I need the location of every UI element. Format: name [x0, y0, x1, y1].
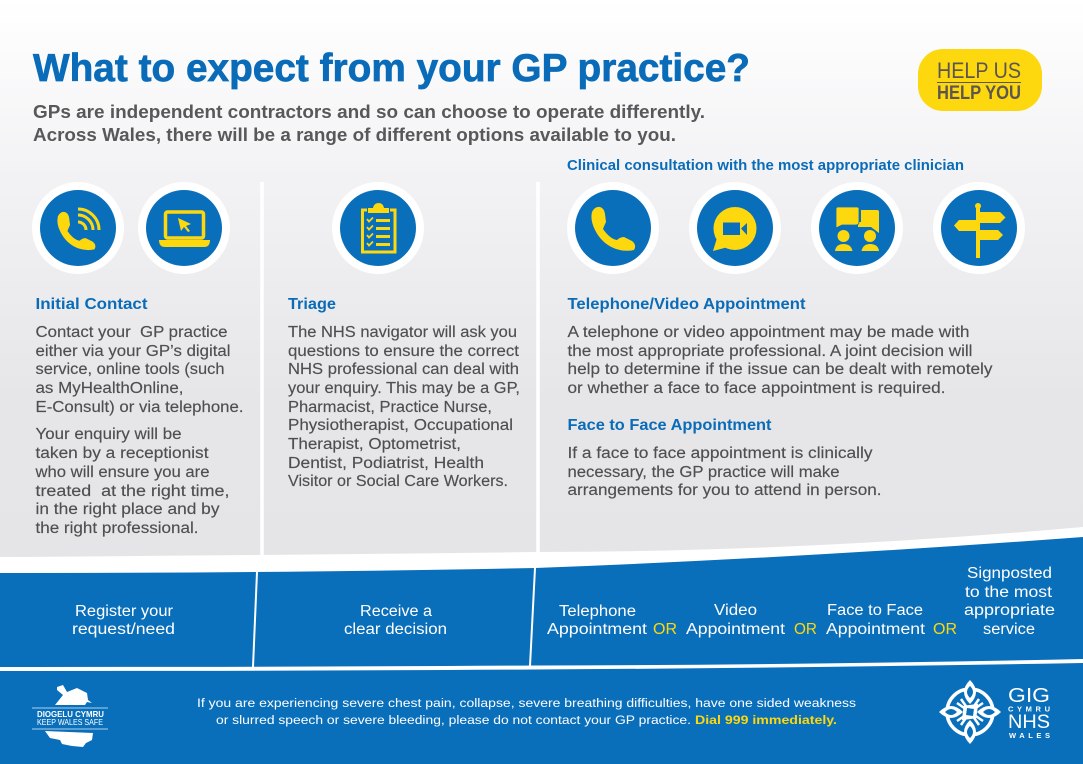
text block: initial contact: who will ensure you are	[34, 464, 209, 481]
icon: phone with signal	[32, 182, 124, 274]
text block: telephone/video appointment	[568, 296, 993, 397]
outcome: clear decision: Receive a	[360, 603, 432, 620]
logo: GIG Cymru NHS Wales: NHS	[1008, 712, 1050, 733]
text block: initial contact: Your enquiry will be	[36, 426, 182, 443]
text block: triage: Pharmacist, Practice Nurse,	[288, 399, 492, 416]
text block: initial contact: as MyHealthOnline,	[36, 380, 184, 397]
panel: grey background	[0, 0, 1083, 557]
text block: initial contact: in the right place and by	[36, 501, 220, 518]
outcome: signposted: Signposted	[967, 565, 1052, 582]
outcome: video appointment: Appointment	[686, 621, 786, 638]
footer warning text	[197, 696, 856, 727]
logo: GIG Cymru NHS Wales: WALES	[1009, 731, 1050, 740]
text block: initial contact: taken by a receptionist	[36, 445, 209, 462]
text block: telephone/video appointment: or whether a face to face appointment is required.	[568, 380, 946, 397]
text block: face to face appointment: Face to Face Appointment	[568, 417, 772, 434]
icon: signpost	[933, 182, 1025, 274]
logo: keep wales safe: KEEP WALES SAFE	[37, 718, 103, 727]
outcome: signposted: to the most	[965, 584, 1053, 601]
icon: clipboard checklist	[332, 182, 424, 274]
outcome: telephone appointment	[547, 603, 677, 638]
text block: initial contact: E-Consult) or via telephone.	[36, 399, 244, 416]
text block: triage: NHS professional can deal with	[288, 361, 519, 378]
footer warning text: If you are experiencing severe chest pain, collapse, severe breathing difficulties, have one sided weakness	[197, 696, 856, 710]
icon: conversation	[811, 182, 903, 274]
text block: triage	[288, 296, 520, 490]
text block: face to face appointment: arrangements for you to attend in person.	[568, 482, 882, 499]
panel: blue outcomes band	[0, 537, 1083, 667]
logo: keep wales safe: DIOGELU CYMRU	[37, 709, 104, 719]
badge: help us help you: HELP YOU	[937, 83, 1021, 104]
outcome: face to face appointment: Face to Face	[827, 602, 923, 619]
intro text: Across Wales, there will be a range of different options available to you.	[33, 125, 676, 145]
outcome: face to face appointment: OR	[933, 621, 957, 638]
text block: face to face appointment: If a face to face appointment is clinically	[568, 445, 873, 462]
title: What to expect from your GP practice?	[33, 47, 750, 90]
outcome: face to face appointment: Appointment	[826, 621, 926, 638]
text block: initial contact: either via your GP’s digital	[36, 343, 230, 360]
panel: blue footer	[0, 663, 1083, 764]
logo: GIG Cymru NHS Wales: GIG	[1008, 685, 1050, 707]
text block: triage: Triage	[288, 296, 336, 313]
text block: face to face appointment	[568, 417, 882, 499]
logo: keep wales safe	[32, 685, 108, 747]
outcome: video appointment: OR	[794, 621, 817, 638]
logo: GIG Cymru NHS Wales: CYMRU	[1008, 704, 1050, 714]
icon: video chat	[689, 182, 781, 274]
badge: help us help you	[918, 49, 1042, 111]
text block: triage: questions to ensure the correct	[288, 343, 520, 360]
outcome: register request: request/need	[72, 621, 175, 638]
outcome: telephone appointment: OR	[653, 621, 677, 638]
outcome: signposted: appropriate	[964, 602, 1055, 619]
text block: initial contact: service, online tools (such	[36, 361, 224, 378]
text block: telephone/video appointment: the most appropriate professional. A joint decision will	[568, 343, 972, 360]
text block: initial contact: the right professional.	[36, 520, 198, 537]
outcome: telephone appointment: Telephone	[559, 603, 636, 620]
outcome: register request: Register your	[75, 603, 173, 620]
footer warning text: or slurred speech or severe bleeding, please do not contact your GP practice.	[216, 713, 691, 727]
text block: telephone/video appointment: help to determine if the issue can be dealt with remotely	[568, 361, 993, 378]
text block: telephone/video appointment: Telephone/Video Appointment	[568, 296, 806, 313]
text block: initial contact	[34, 296, 244, 537]
icon: telephone	[567, 182, 659, 274]
text block: triage: Therapist, Optometrist,	[288, 436, 461, 453]
badge: help us help you: HELP US	[937, 58, 1021, 83]
text block: initial contact: Initial Contact	[36, 296, 148, 313]
outcome: signposted: service	[983, 621, 1035, 638]
outcome: clear decision	[344, 603, 447, 638]
heading: clinical consultation: Clinical consultation with the most appropriate clinician	[567, 158, 964, 174]
text block: telephone/video appointment: A telephone or video appointment may be made with	[568, 324, 970, 341]
outcome: video appointment	[686, 602, 817, 638]
text block: triage: Physiotherapist, Occupational	[288, 417, 513, 434]
footer warning text: Dial 999 immediately.	[695, 713, 837, 727]
text block: initial contact: Contact your GP practice	[36, 324, 228, 341]
intro text: GPs are independent contractors and so can choose to operate differently.	[33, 102, 705, 122]
outcome: video appointment: Video	[714, 602, 757, 619]
logo: GIG Cymru NHS Wales	[939, 680, 1050, 744]
text block: initial contact: treated at the right time,	[36, 483, 230, 500]
outcome: register request	[72, 603, 175, 638]
text block: triage: The NHS navigator will ask you	[288, 324, 517, 341]
outcome: face to face appointment	[826, 602, 957, 638]
outcome: clear decision: clear decision	[344, 621, 447, 638]
intro text	[33, 102, 705, 145]
text block: triage: Visitor or Social Care Workers.	[288, 473, 508, 490]
text block: triage: your enquiry. This may be a GP,	[288, 380, 520, 397]
icon: laptop	[138, 182, 230, 274]
text block: face to face appointment: necessary, the GP practice will make	[568, 464, 840, 481]
text block: triage: Dentist, Podiatrist, Health	[288, 455, 484, 472]
outcome: signposted	[964, 565, 1055, 638]
outcome: telephone appointment: Appointment	[547, 621, 648, 638]
